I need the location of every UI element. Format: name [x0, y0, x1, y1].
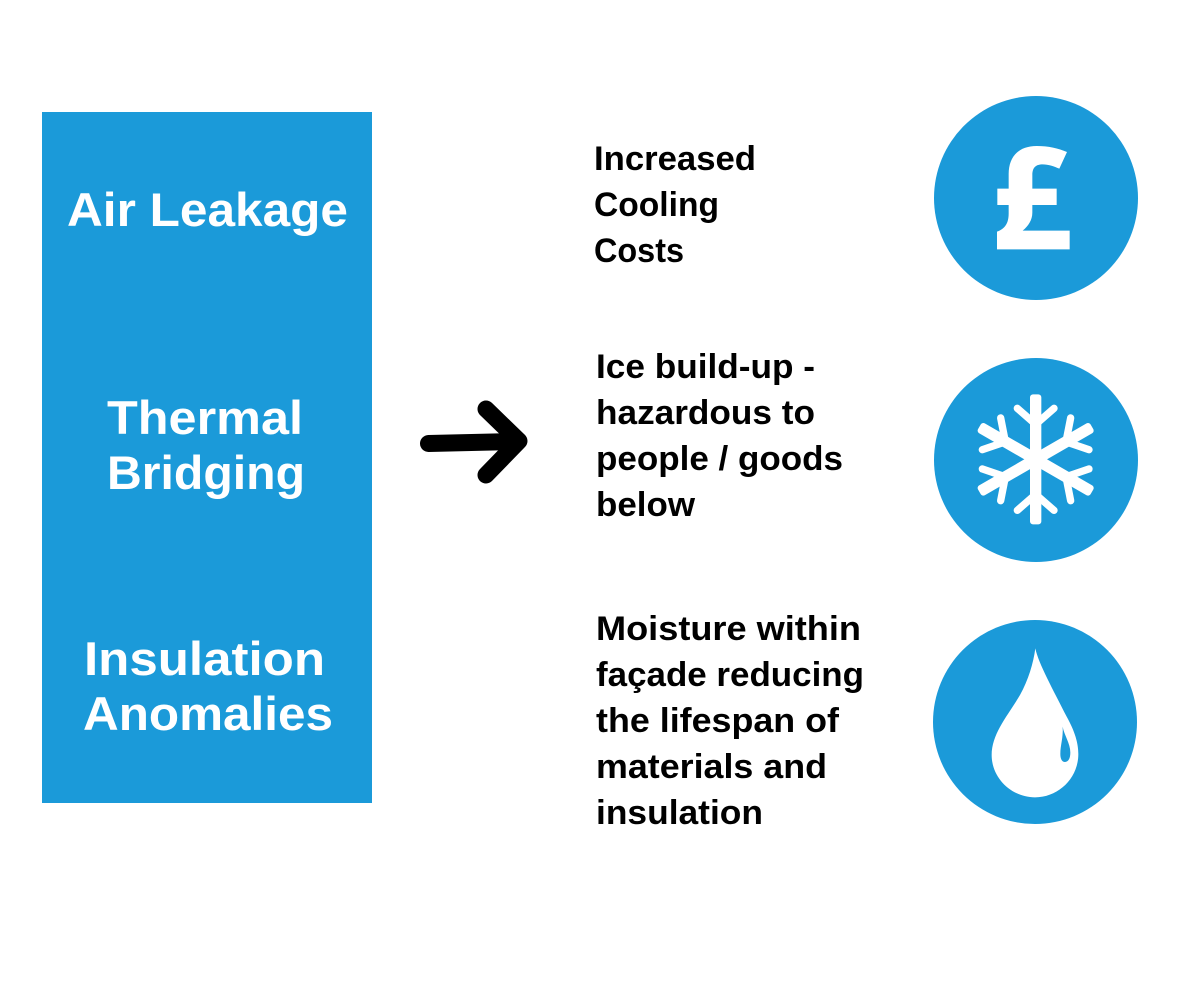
- heading: thermal bridging: Bridging: [107, 446, 305, 499]
- heading: insulation anomalies: Insulation: [84, 632, 325, 685]
- text: ice build-up: below: [596, 486, 696, 524]
- text: increased cooling costs: Cooling: [594, 186, 719, 224]
- text: ice build-up: people / goods: [596, 440, 843, 478]
- icon: pound sterling: [934, 96, 1138, 300]
- heading: thermal bridging: Thermal: [107, 391, 303, 444]
- text: ice build-up: Ice build-up -: [596, 348, 815, 386]
- text: increased cooling costs: [594, 140, 756, 270]
- text: increased cooling costs: Costs: [594, 232, 684, 270]
- icon: water drop: [933, 620, 1137, 824]
- icon: snowflake: [934, 358, 1138, 562]
- arrow: [428, 409, 519, 475]
- panel background: [42, 112, 372, 803]
- panel: causes: [42, 112, 372, 803]
- heading: insulation anomalies: [83, 632, 333, 740]
- text: moisture within facade: Moisture within: [596, 610, 861, 648]
- heading: thermal bridging: [107, 391, 305, 499]
- heading: air leakage: Air Leakage: [67, 183, 348, 236]
- text: moisture within facade: façade reducing: [596, 656, 864, 694]
- text: ice build-up: hazardous to: [596, 394, 815, 432]
- text: moisture within facade: [596, 610, 864, 832]
- text: increased cooling costs: Increased: [594, 140, 756, 178]
- text: moisture within facade: materials and: [596, 748, 827, 786]
- text: moisture within facade: insulation: [596, 794, 763, 832]
- text: moisture within facade: the lifespan of: [596, 702, 840, 740]
- text: ice build-up: [596, 348, 843, 524]
- heading: insulation anomalies: Anomalies: [83, 687, 333, 740]
